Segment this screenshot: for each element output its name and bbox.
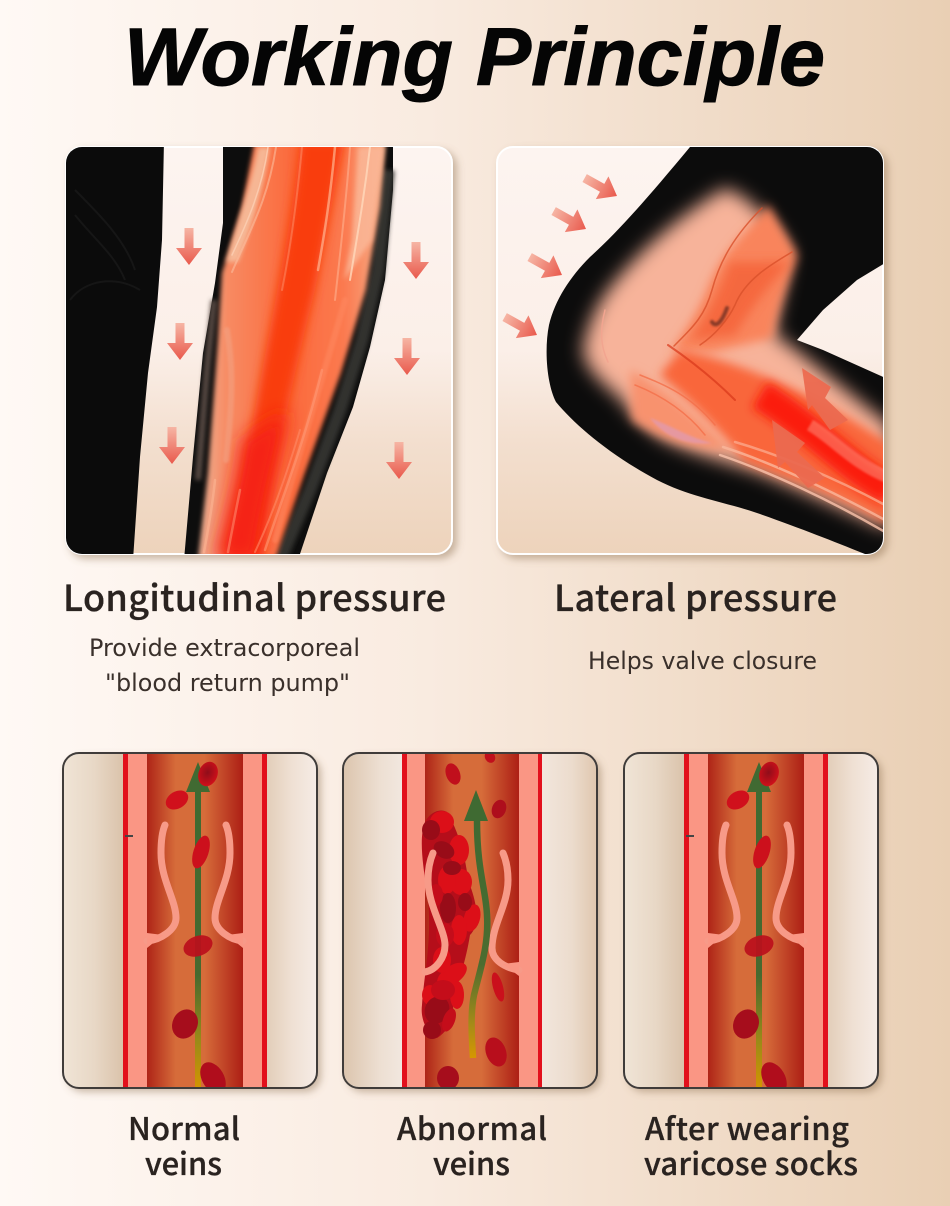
- label: normal veins: veins: [145, 1139, 222, 1184]
- label: after wearing varicose socks: After wearing: [645, 1104, 849, 1149]
- label: after wearing varicose socks: varicose socks: [644, 1139, 858, 1184]
- upper muscle band: [672, 205, 797, 352]
- creases: [602, 208, 792, 400]
- panel: abnormal veins: [343, 749, 597, 1090]
- heading: lateral pressure: Lateral pressure: [554, 570, 837, 622]
- left valve over clot: [425, 853, 445, 972]
- text: longitudinal description: Provide extracorporeal: [89, 634, 360, 662]
- panel: longitudinal pressure photo: [60, 140, 452, 560]
- label: after wearing varicose socks: [644, 1104, 858, 1184]
- pale tendon stripes: [635, 375, 885, 532]
- lower red band: [660, 350, 890, 525]
- text: longitudinal description: "blood return pump": [105, 669, 350, 697]
- panel: normal veins: [63, 753, 317, 1098]
- label: normal veins: Normal: [128, 1104, 240, 1149]
- exposed muscles: [583, 188, 890, 532]
- rebound arrows on forearm: [772, 368, 848, 488]
- label: abnormal veins: Abnormal: [397, 1104, 547, 1149]
- label: abnormal veins: [397, 1104, 547, 1184]
- pressure arrows, from upper left: [502, 174, 617, 338]
- blood clot: [420, 810, 483, 1039]
- title: Working Principle: [124, 12, 825, 103]
- text: lateral description: Helps valve closure: [588, 647, 817, 675]
- calf with muscles: [184, 140, 393, 560]
- label: abnormal veins: veins: [433, 1139, 510, 1184]
- panel: lateral pressure photo: [497, 140, 890, 556]
- text: longitudinal description: [89, 634, 360, 697]
- bent arm in black sleeve: [547, 140, 890, 556]
- left leg in black sock: [60, 140, 164, 560]
- panel: after wearing veins: [624, 753, 878, 1098]
- label: normal veins: [128, 1104, 240, 1184]
- heading: longitudinal pressure: Longitudinal pressure: [63, 570, 446, 622]
- green flow arrow: [472, 821, 487, 1058]
- pressure arrows, downward: [159, 228, 429, 479]
